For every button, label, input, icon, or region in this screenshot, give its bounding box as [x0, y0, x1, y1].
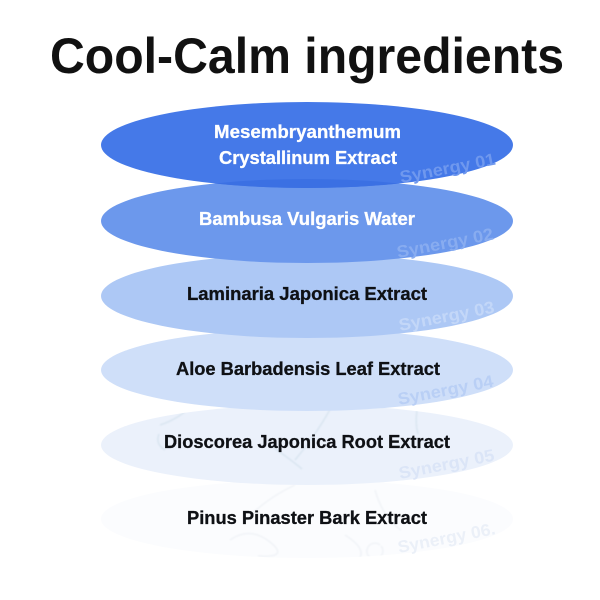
overlap shading: [216, 179, 398, 188]
layer 1: Mesembryanthemum Crystallinum Extract: Crystallinum Extract: [219, 148, 397, 168]
title: Cool-Calm ingredients: [50, 28, 564, 84]
layer 1: Mesembryanthemum Crystallinum Extract: Synergy 01: [398, 150, 497, 187]
layer 3: Laminaria Japonica Extract: [101, 254, 513, 338]
layer 1: Mesembryanthemum Crystallinum Extract: Mesembryanthemum: [214, 122, 401, 142]
layer 5: Dioscorea Japonica Root Extract: [101, 408, 513, 485]
layer 2: Bambusa Vulgaris Water: Bambusa Vulgaris Water: [199, 209, 415, 229]
layer 6: Pinus Pinaster Bark Extract: Synergy 06.: [396, 519, 497, 557]
infographic: [52, 36, 562, 557]
layer 5: Dioscorea Japonica Root Extract: Dioscorea Japonica Root Extract: [164, 432, 450, 452]
layer 3: Laminaria Japonica Extract: Laminaria Japonica Extract: [187, 284, 427, 304]
layer 2: Bambusa Vulgaris Water: Synergy 02: [395, 225, 495, 262]
layer 4: Aloe Barbadensis Leaf Extract: [101, 329, 513, 411]
layer 6: Pinus Pinaster Bark Extract: Pinus Pinaster Bark Extract: [187, 508, 427, 528]
layer 6: Pinus Pinaster Bark Extract: [188, 485, 495, 557]
layer 4: Aloe Barbadensis Leaf Extract: Synergy 04: [396, 372, 496, 409]
layer 2: Bambusa Vulgaris Water: [101, 179, 513, 263]
layer 1: Mesembryanthemum Crystallinum Extract: [101, 102, 513, 188]
layer 3: Laminaria Japonica Extract: Synergy 03: [397, 298, 496, 335]
layer 4: Aloe Barbadensis Leaf Extract: Aloe Barbadensis Leaf Extract: [176, 359, 440, 379]
layer 5: Dioscorea Japonica Root Extract: Synergy 05: [397, 446, 496, 483]
